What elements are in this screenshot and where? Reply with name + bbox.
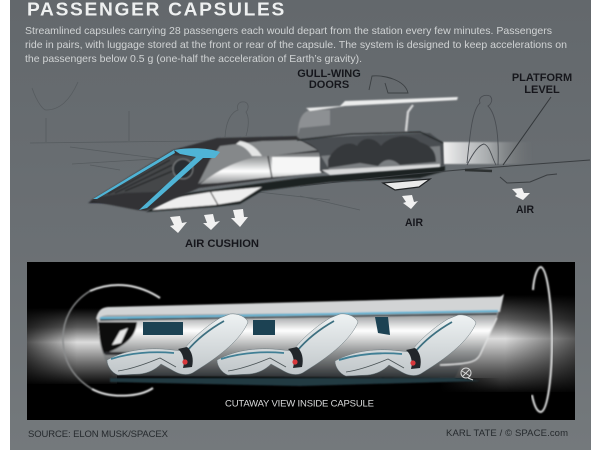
author credit: KARL TATE / © SPACE.com: [446, 428, 568, 439]
air arrow centre: [402, 195, 418, 209]
hyperloop capsule exterior sketch: [88, 95, 590, 212]
air cushion label: AIR CUSHION: [185, 238, 259, 250]
intro text: Streamlined capsules carrying 28 passengers each would depart from the station every few minutes. Passengers: [25, 25, 552, 37]
light beam in tube: [27, 295, 575, 392]
capsule windows: [143, 317, 390, 335]
platform level line: [300, 160, 590, 186]
title: PASSENGER CAPSULES: [27, 0, 286, 20]
intro text: the passengers below 0.5 g (one-half the acceleration of Earth’s gravity).: [25, 53, 362, 65]
right tube ring: [532, 267, 552, 412]
platform level label: [512, 72, 572, 96]
lower hull: [88, 166, 445, 212]
upper body: [90, 136, 324, 211]
cutaway caption: CUTAWAY VIEW INSIDE CAPSULE: [225, 398, 374, 410]
gull-wing doors label: DOORS: [309, 79, 349, 91]
gull-wing door: [297, 97, 458, 143]
platform figure: [465, 95, 498, 171]
left tube ring: [63, 285, 160, 396]
capsule interior: [96, 294, 504, 386]
intro text: [25, 25, 567, 65]
leader: gull-wing doors: [369, 76, 408, 93]
source credit: SOURCE: ELON MUSK/SPACEX: [28, 429, 169, 440]
air cushion arrows: [170, 209, 248, 233]
platform level label: PLATFORM: [512, 72, 572, 84]
background sketch: horizon, tree and figure: [30, 82, 360, 210]
air arrow right: [512, 188, 530, 200]
tube extension fading to the right: [443, 142, 533, 164]
black panel background: [27, 262, 575, 420]
cockpit window: [100, 155, 198, 197]
air label centre: AIR: [405, 217, 423, 229]
gull-wing doors label: GULL-WING: [297, 68, 361, 80]
intro text: ride in pairs, with luggage stored at the front or rear of the capsule. The system is designed to keep accelerations on: [25, 39, 567, 51]
platform level label: LEVEL: [524, 84, 560, 96]
air vent under capsule: [383, 179, 430, 190]
seat row: [107, 314, 476, 376]
gull-wing doors label: [297, 68, 361, 91]
icon: capsule emblem: [461, 368, 473, 380]
cutaway panel: [27, 262, 575, 420]
leader: platform level: [503, 97, 551, 165]
air label right: AIR: [516, 204, 534, 216]
open cabin and passengers: [300, 133, 444, 175]
blue windscreen frame: [93, 148, 220, 210]
